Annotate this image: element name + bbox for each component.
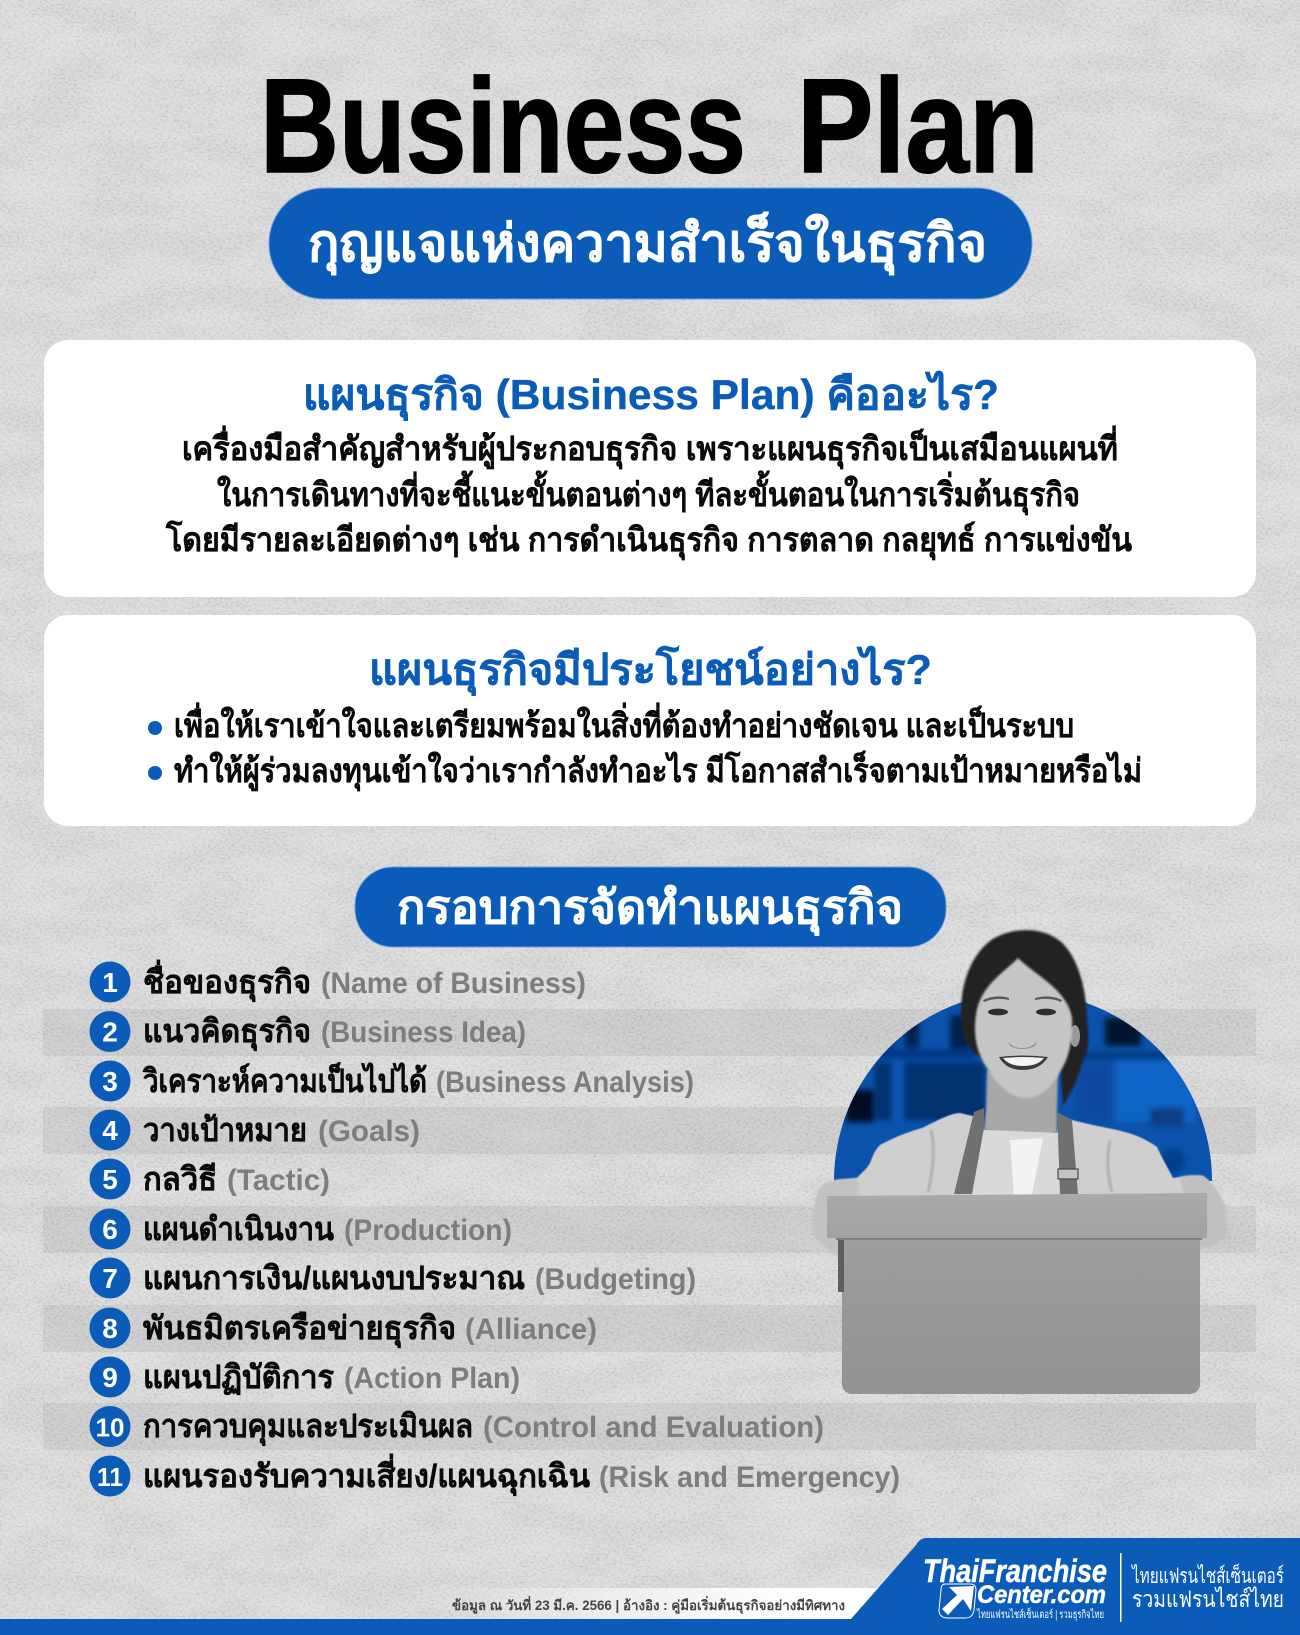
item 11: แผนรองรับความเสี่ยง/แผนฉุกเฉิน xyxy=(143,1453,590,1497)
logo tagline: ไทยแฟรนไชส์เซ็นเตอร์ | รวมธุรกิจไทย xyxy=(976,1607,1104,1621)
item 8 xyxy=(90,1308,597,1349)
framework heading pill xyxy=(355,867,946,947)
item 11 xyxy=(90,1453,900,1497)
hands xyxy=(812,1178,860,1262)
photo: woman holding a box xyxy=(812,930,1227,1394)
item 4: (Goals) xyxy=(318,1115,420,1148)
item 11: (Risk and Emergency) xyxy=(599,1461,900,1494)
neck xyxy=(984,1070,1058,1136)
box left corner xyxy=(838,1240,844,1292)
text block: definition xyxy=(165,425,1132,561)
bullet one: เพื่อให้เราเข้าใจและเตรียมพร้อมในสิ่งที่ต้องทำอย่างชัดเจน และเป็นระบบ xyxy=(174,702,1074,744)
item 6: (Production) xyxy=(344,1214,512,1247)
item 4 xyxy=(90,1110,420,1150)
item 8: (Alliance) xyxy=(465,1313,597,1346)
item 8: 8 xyxy=(102,1313,118,1344)
apron straps xyxy=(954,1108,984,1194)
item 1: (Name of Business) xyxy=(321,967,586,1000)
item 9: (Action Plan) xyxy=(344,1362,520,1395)
panel: what is a business plan xyxy=(44,340,1256,597)
box body xyxy=(842,1225,1200,1394)
item 5 xyxy=(90,1158,330,1200)
item 3: 3 xyxy=(102,1066,118,1097)
item 1: 1 xyxy=(102,967,118,998)
item 3: (Business Analysis) xyxy=(436,1066,694,1099)
box shadow under lid xyxy=(836,1237,1202,1240)
item 8: พันธมิตรเครือข่ายธุรกิจ xyxy=(143,1310,456,1349)
title: Plan xyxy=(797,52,1039,201)
ear xyxy=(1070,1025,1080,1047)
item 10: (Control and Evaluation) xyxy=(483,1411,824,1444)
heading: what is a business plan: แผนธุรกิจ (Business Plan) คืออะไร? xyxy=(303,370,999,421)
item 7: 7 xyxy=(102,1263,118,1294)
cardigan and arms xyxy=(812,1113,1227,1260)
subtitle pill xyxy=(269,188,1032,299)
smile xyxy=(999,1056,1048,1070)
shirt xyxy=(972,1130,1060,1195)
item 9 xyxy=(90,1356,520,1398)
face xyxy=(975,958,1072,1098)
heading: benefits: แผนธุรกิจมีประโยชน์อย่างไร? xyxy=(369,645,932,696)
panel: benefits xyxy=(44,615,1256,826)
item 2: แนวคิดธุรกิจ xyxy=(143,1013,311,1052)
item 2: 2 xyxy=(102,1016,118,1048)
subtitle pill: กุญแจแห่งความสำเร็จในธุรกิจ xyxy=(308,212,987,276)
logo divider xyxy=(1120,1553,1122,1622)
item 10 xyxy=(90,1406,824,1447)
blue dome backdrop xyxy=(834,1002,1212,1181)
item 10: 10 xyxy=(96,1412,124,1442)
item 9: 9 xyxy=(102,1362,118,1393)
item 3: วิเคราะห์ความเป็นไปได้ xyxy=(142,1061,427,1099)
logo arrow icon xyxy=(939,1584,976,1618)
text block: definition: ในการเดินทางที่จะชี้แนะขั้นตอนต่างๆ ทีละขั้นตอนในการเริ่มต้นธุรกิจ xyxy=(217,470,1080,516)
item 7: แผนการเงิน/แผนงบประมาณ xyxy=(143,1260,525,1296)
item 11: 11 xyxy=(97,1462,123,1492)
item 4: วางเป้าหมาย xyxy=(143,1112,307,1148)
item 1: ชื่อของธุรกิจ xyxy=(143,959,311,1003)
text block: definition: โดยมีรายละเอียดต่างๆ เช่น การดำเนินธุรกิจ การตลาด กลยุทธ์ การแข่งขัน xyxy=(165,520,1132,561)
item 3 xyxy=(90,1060,694,1102)
item 5: (Tactic) xyxy=(227,1164,330,1197)
logo wordmark: ThaiFranchise xyxy=(923,1553,1107,1589)
eyes and brows xyxy=(983,996,1062,1015)
item 7 xyxy=(90,1258,696,1298)
text block: definition: เครื่องมือสำคัญสำหรับผู้ประกอบธุรกิจ เพราะแผนธุรกิจเป็นเสมือนแผนที่ xyxy=(182,425,1118,470)
nose xyxy=(1008,1041,1037,1049)
bullet two: ทำให้ผู้ร่วมลงทุนเข้าใจว่าเรากำลังทำอะไร มีโอกาสสำเร็จตามเป้าหมายหรือไม่ xyxy=(174,750,1142,792)
item 1 xyxy=(90,959,586,1003)
source strip xyxy=(430,1588,885,1619)
hair xyxy=(961,930,1088,1105)
item 7: (Budgeting) xyxy=(535,1263,696,1296)
item 9: แผนปฏิบัติการ xyxy=(143,1359,334,1395)
logo wordmark xyxy=(923,1553,1107,1609)
title: Business xyxy=(260,52,746,201)
framework heading pill: กรอบการจัดทำแผนธุรกิจ xyxy=(397,881,903,936)
footer xyxy=(0,1538,1300,1635)
alternating list bands xyxy=(43,1009,1256,1450)
item 10: การควบคุมและประเมินผล xyxy=(143,1408,473,1447)
box lid xyxy=(827,1193,1207,1238)
cardigan folds xyxy=(928,1130,1112,1192)
item 6: 6 xyxy=(102,1214,118,1245)
footer slogan xyxy=(1131,1562,1284,1612)
logo wordmark: Center.com xyxy=(977,1581,1106,1609)
item 6 xyxy=(90,1208,512,1250)
footer blue shape xyxy=(0,1538,1300,1635)
item 2: (Business Idea) xyxy=(321,1016,526,1049)
item 5: 5 xyxy=(102,1164,118,1195)
framework list xyxy=(90,959,900,1497)
source note: ข้อมูล ณ วันที่ 23 มี.ค. 2566 | อ้างอิง : คู่มือเริ่มต้นธุรกิจอย่างมีทิศทาง xyxy=(452,1595,845,1614)
item 6: แผนดำเนินงาน xyxy=(143,1211,334,1247)
item 2 xyxy=(90,1011,526,1052)
item 5: กลวิธี xyxy=(143,1161,217,1197)
item 4: 4 xyxy=(102,1115,118,1146)
